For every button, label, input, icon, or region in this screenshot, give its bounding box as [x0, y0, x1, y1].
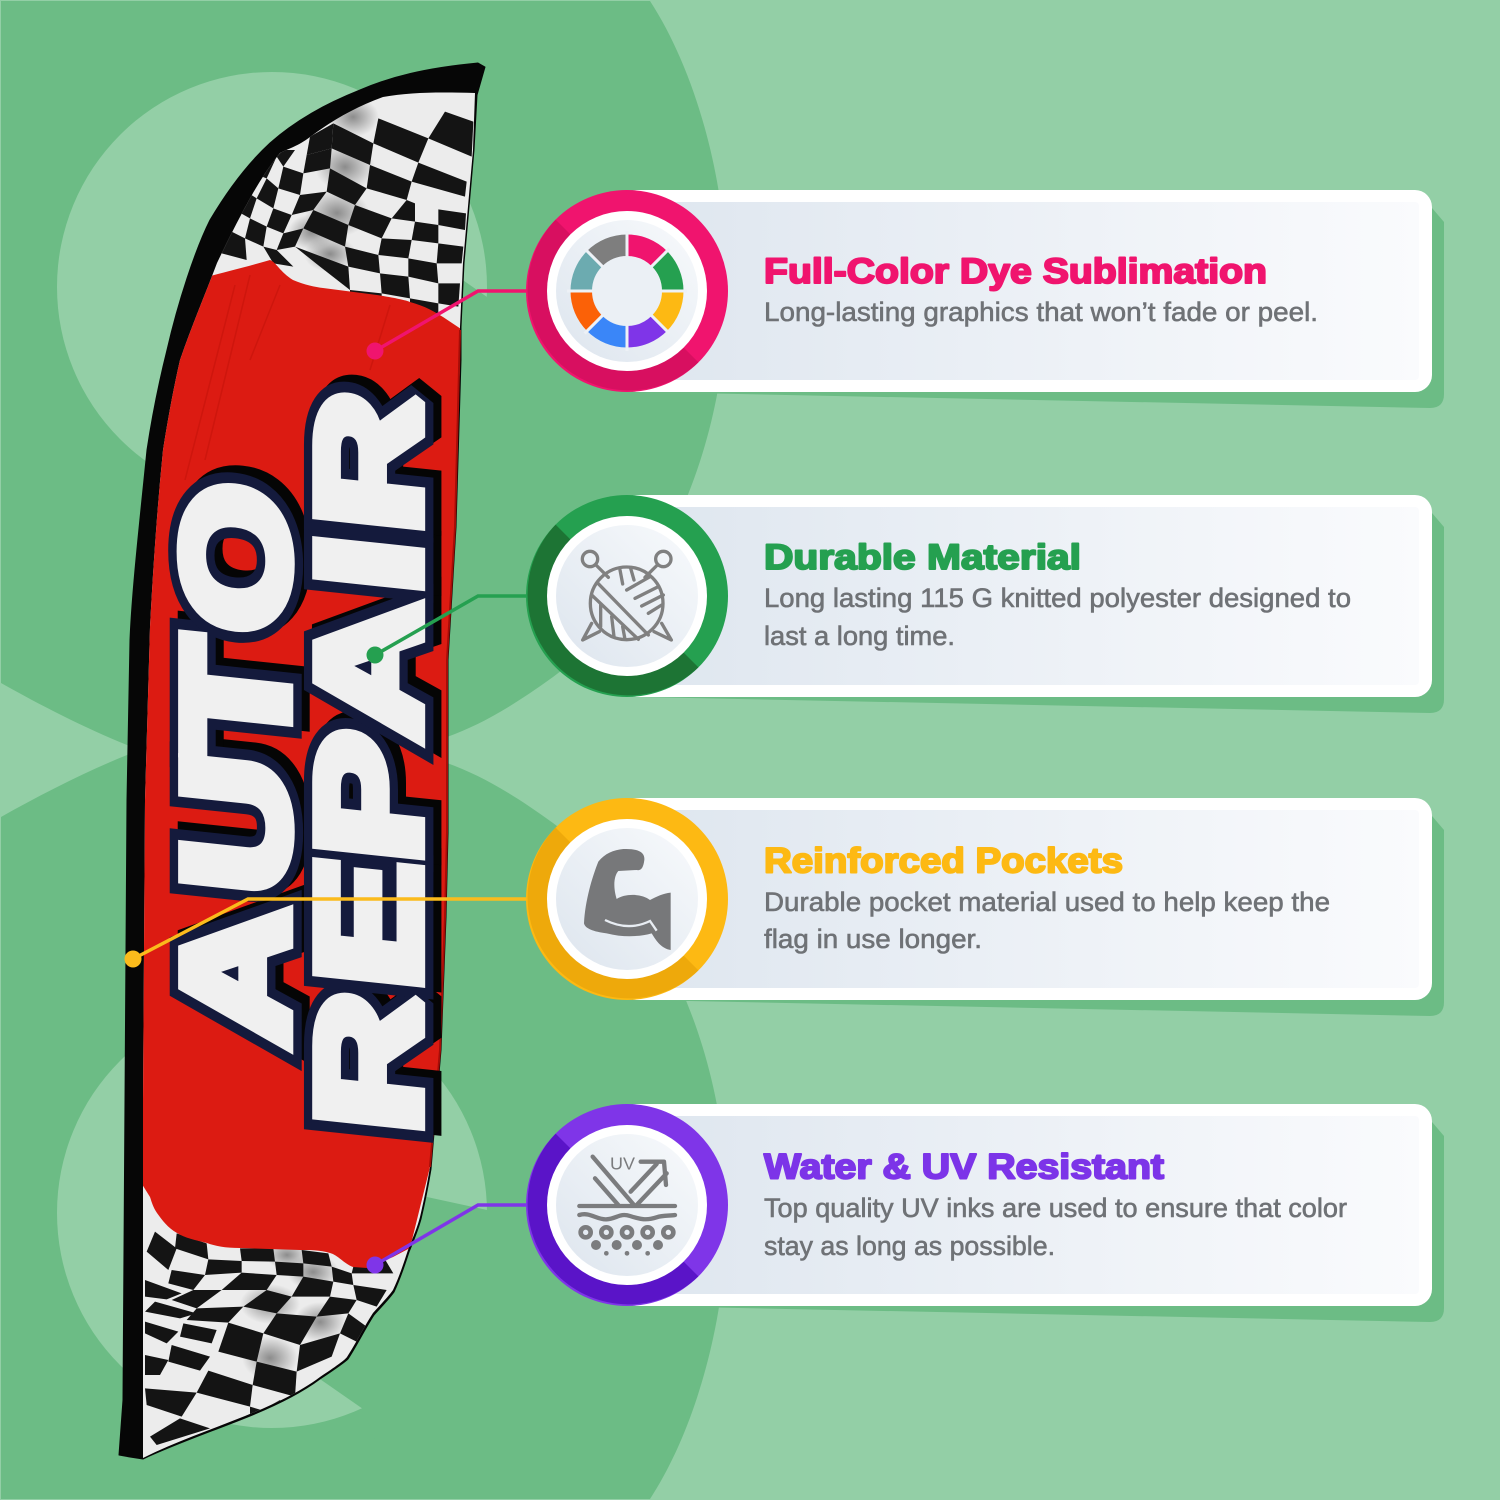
description: Durable pocket material used to help keep the	[764, 887, 1330, 917]
description: Long-lasting graphics that won’t fade or peel.	[764, 297, 1318, 327]
panel: reinforced pockets	[124, 798, 1444, 1016]
card	[620, 190, 1444, 408]
panel: durable material	[366, 495, 1444, 713]
card	[620, 1104, 1444, 1322]
icon: flexed arm	[584, 849, 671, 950]
fabric folds	[185, 275, 390, 480]
connector: green	[366, 596, 530, 664]
feather flag	[119, 60, 490, 1470]
flag lettering: REPAIR: REPAIR	[287, 384, 451, 1139]
description: stay as long as possible.	[764, 1231, 1055, 1261]
top checkered pattern	[222, 112, 474, 314]
flag lettering: REPAIR: REPAIR	[287, 384, 451, 1139]
icon: color wheel	[567, 231, 687, 351]
icon: uv protection layers: UV	[610, 1153, 635, 1173]
red field	[135, 260, 470, 1268]
heading: Durable Material	[764, 538, 1081, 577]
ring badge	[526, 1104, 728, 1306]
heading: Full-Color Dye Sublimation	[764, 252, 1267, 291]
card	[620, 495, 1444, 713]
description	[764, 583, 1351, 651]
ring badge	[526, 495, 728, 697]
icon: uv protection layers	[579, 1153, 675, 1256]
connector: purple	[366, 1205, 530, 1274]
flag lettering: REPAIR: REPAIR	[295, 377, 459, 1132]
description: Long lasting 115 G knitted polyester designed to	[764, 583, 1351, 613]
flag lettering: AUTO: AUTO	[161, 468, 327, 1044]
heading: Water & UV Resistant	[764, 1148, 1164, 1186]
flag lettering: AUTO: AUTO	[153, 475, 319, 1051]
connector: pink	[366, 291, 530, 360]
description: flag in use longer.	[764, 924, 982, 954]
ring badge	[526, 798, 728, 1000]
panel: full-color dye sublimation	[366, 190, 1444, 408]
ring badge	[526, 190, 728, 392]
flag right edge seam	[430, 330, 460, 1167]
panel: water and uv resistant	[366, 1104, 1444, 1322]
checkered and red flag fabric	[143, 92, 475, 1458]
bottom checkered pattern	[145, 1232, 393, 1445]
heading: Reinforced Pockets	[764, 842, 1123, 880]
description	[764, 1193, 1347, 1261]
description: Top quality UV inks are used to ensure that color	[764, 1193, 1347, 1223]
connector: yellow	[124, 899, 530, 968]
fabric sheen	[240, 97, 379, 1380]
description: last a long time.	[764, 621, 955, 651]
card	[620, 798, 1444, 1016]
description	[764, 887, 1330, 954]
icon: yarn ball and needles	[582, 551, 671, 640]
flag pole sleeve	[119, 63, 485, 1459]
flag lettering: AUTO: AUTO	[153, 475, 319, 1051]
